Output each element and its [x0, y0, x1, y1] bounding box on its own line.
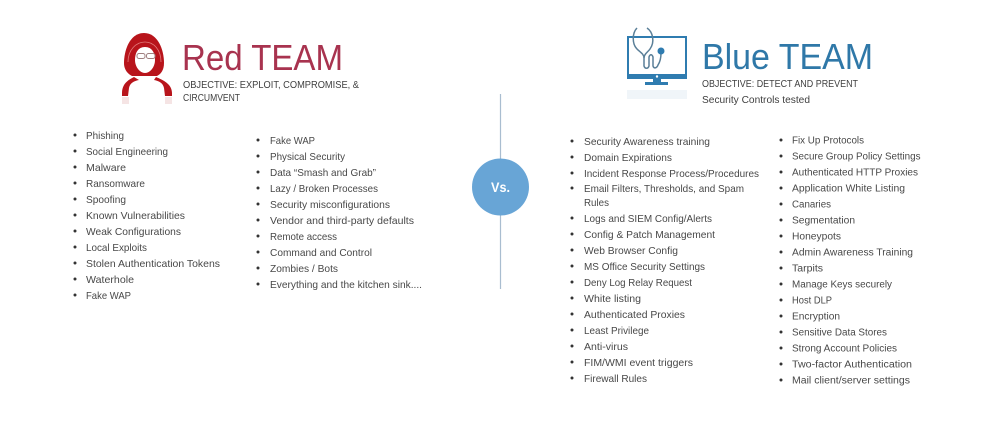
list: blue team column 2: Host DLP: [792, 296, 832, 306]
list: blue team column 1: Security Awareness training: [584, 136, 710, 148]
text: blue objective: OBJECTIVE: DETECT AND PREVENT: [702, 79, 858, 90]
list: red team column 1: Stolen Authentication Tokens: [86, 258, 220, 270]
list: blue team column 2: Fix Up Protocols: [792, 136, 864, 146]
text: red objective: [183, 80, 359, 104]
list: blue team column 1: Incident Response Process/Procedures: [584, 168, 759, 180]
divider with Vs. badge: [472, 94, 529, 289]
list: blue team column 2: Encryption: [792, 312, 840, 322]
list: blue team column 1: Web Browser Config: [584, 245, 678, 257]
text: red objective: OBJECTIVE: EXPLOIT, COMPROMISE, &: [183, 80, 359, 91]
text: blue objective: Security Controls tested: [702, 95, 810, 106]
list: blue team column 1: Authenticated Proxies: [584, 309, 685, 321]
list: blue team column 1: Anti-virus: [584, 341, 628, 353]
list: blue team column 2: Mail client/server settings: [792, 376, 910, 386]
list: red team column 2: Data “Smash and Grab”: [270, 167, 376, 179]
list: red team column 2: Fake WAP: [270, 135, 315, 147]
list: red team column 1: Ransomware: [86, 178, 145, 190]
list: blue team column 2: Authenticated HTTP Proxies: [792, 168, 918, 178]
list: blue team column 2: Canaries: [792, 200, 831, 210]
list: red team column 1: Fake WAP: [86, 290, 131, 302]
badge: Vs.: [472, 158, 529, 216]
panel: blue team header: [627, 28, 873, 106]
text: red objective: CIRCUMVENT: [183, 93, 240, 104]
list: red team column 2: Remote access: [270, 231, 337, 243]
list: red team column 2: Physical Security: [270, 151, 346, 163]
list: blue team column 2: Tarpits: [792, 264, 823, 274]
list: blue team column 1: Config & Patch Management: [584, 229, 715, 241]
list: blue team column 1: MS Office Security Settings: [584, 261, 705, 273]
list: blue team column 2: Secure Group Policy Settings: [792, 152, 920, 162]
list: red team column 1: Local Exploits: [86, 242, 147, 254]
list: red team column 2: Lazy / Broken Processes: [270, 183, 378, 195]
list: red team column 2: Zombies / Bots: [270, 263, 338, 275]
list: red team column 2: [256, 135, 422, 291]
list: blue team column 1: Least Privilege: [584, 325, 649, 337]
list: red team column 1: Malware: [86, 162, 126, 174]
list: blue team column 1: Domain Expirations: [584, 152, 672, 164]
list: red team column 1: Spoofing: [86, 194, 126, 206]
list: red team column 1: Social Engineering: [86, 146, 168, 158]
list: blue team column 1: [570, 136, 759, 385]
panel: red team header: [122, 33, 359, 104]
text: blue objective: [702, 79, 858, 106]
list: blue team column 2: Manage Keys securely: [792, 280, 892, 290]
badge: Vs.: Vs.: [491, 179, 510, 195]
list: blue team column 2: Segmentation: [792, 216, 855, 226]
list: red team column 2: Everything and the kitchen sink....: [270, 279, 422, 291]
list: blue team column 1: Firewall Rules: [584, 373, 647, 385]
list: blue team column 2: Honeypots: [792, 232, 841, 242]
list: red team column 1: Phishing: [86, 130, 124, 142]
list: blue team column 1: White listing: [584, 293, 641, 305]
list: blue team column 1: FIM/WMI event triggers: [584, 357, 693, 369]
title: Blue TEAM: Blue TEAM: [702, 36, 873, 77]
list: blue team column 1: Rules: [584, 197, 609, 209]
list: blue team column 1: Deny Log Relay Request: [584, 277, 692, 289]
title: Red TEAM: Red TEAM: [182, 37, 343, 78]
list: blue team column 2: [780, 136, 920, 386]
list: blue team column 2: Admin Awareness Training: [792, 248, 913, 258]
list: red team column 2: Vendor and third-party defaults: [270, 215, 414, 227]
icon: monitor with stethoscope: [627, 28, 687, 99]
list: blue team column 2: Two-factor Authentication: [792, 360, 912, 370]
list: red team column 1: Weak Configurations: [86, 226, 181, 238]
list: blue team column 2: Sensitive Data Stores: [792, 328, 887, 338]
list: red team column 2: Command and Control: [270, 247, 372, 259]
list: red team column 1: Waterhole: [86, 274, 134, 286]
list: blue team column 2: Strong Account Policies: [792, 344, 897, 354]
list: red team column 1: Known Vulnerabilities: [86, 210, 185, 222]
list: red team column 2: Security misconfigurations: [270, 199, 390, 211]
list: red team column 1: [74, 130, 220, 302]
list: blue team column 1: Logs and SIEM Config/Alerts: [584, 213, 712, 225]
icon: red hooded hacker: [122, 33, 172, 104]
list: blue team column 1: Email Filters, Thresholds, and Spam: [584, 183, 744, 195]
list: blue team column 2: Application White Listing: [792, 184, 905, 194]
